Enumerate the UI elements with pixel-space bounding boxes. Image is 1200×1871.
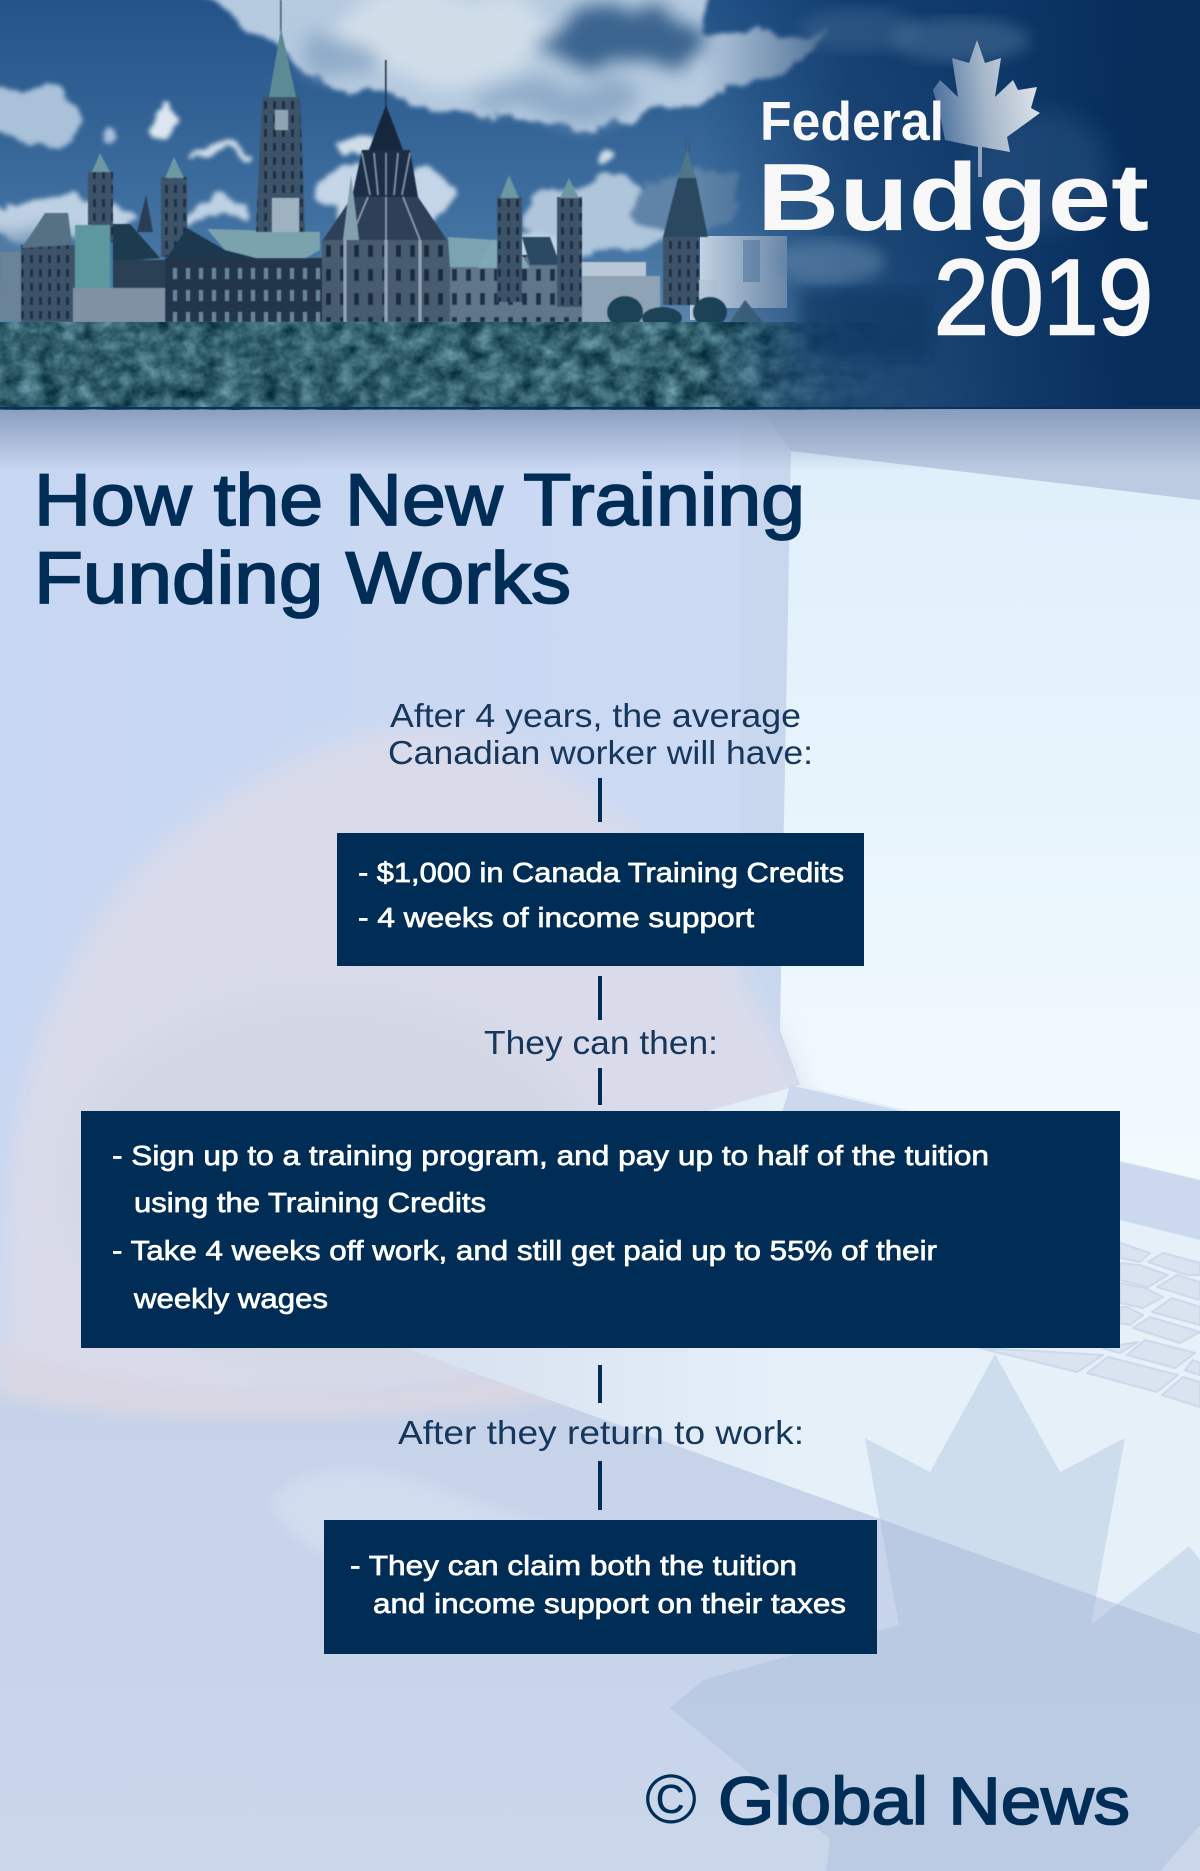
laptop screen xyxy=(780,451,1200,1180)
cloud shading xyxy=(0,0,707,252)
library xyxy=(322,60,450,322)
box: claim: - They can claim both the tuition xyxy=(350,1550,797,1581)
helmet xyxy=(0,727,808,1418)
keyboard xyxy=(980,1243,1200,1407)
box: actions: using the Training Credits xyxy=(134,1187,486,1218)
title: How the New Training xyxy=(34,460,805,541)
lower background xyxy=(0,1348,1200,1871)
blurred right backdrop xyxy=(775,8,1110,360)
intro text: Canadian worker will have: xyxy=(388,734,813,771)
budget logo text xyxy=(757,90,1153,357)
text: they can then: They can then: xyxy=(484,1024,718,1061)
clouds xyxy=(0,0,826,268)
budget logo text: 2019 xyxy=(934,237,1153,357)
title xyxy=(34,460,805,619)
wrench xyxy=(270,1470,650,1590)
peace tower xyxy=(256,0,305,232)
intro text: After 4 years, the average xyxy=(390,697,801,734)
connector line xyxy=(598,1461,602,1510)
box: actions: - Take 4 weeks off work, and still get paid up to 55% of their xyxy=(112,1235,937,1266)
credit: global news: © xyxy=(645,1760,697,1838)
connector line xyxy=(598,778,602,822)
header bottom edge xyxy=(0,407,1200,409)
east towers xyxy=(497,175,582,307)
laptop screen bezel xyxy=(740,409,1200,1200)
pale building xyxy=(690,236,787,320)
box: actions xyxy=(81,1111,1120,1348)
connector line xyxy=(598,1365,602,1403)
budget logo text: Federal xyxy=(760,90,944,152)
connector line xyxy=(598,1068,602,1105)
connector line xyxy=(598,976,602,1020)
header shadow xyxy=(0,409,1200,471)
left far block xyxy=(0,213,76,322)
intro text xyxy=(388,697,813,771)
box: actions: weekly wages xyxy=(133,1283,328,1314)
page background xyxy=(0,409,1200,1871)
box: credits xyxy=(337,833,864,966)
box: credits: - $1,000 in Canada Training Credits xyxy=(358,857,844,888)
scaffold and west wing xyxy=(73,224,167,322)
screen top band xyxy=(760,409,1200,500)
title: Funding Works xyxy=(34,538,571,619)
credit: global news: Global News xyxy=(718,1764,1130,1839)
header banner xyxy=(0,0,1200,410)
box: actions: - Sign up to a training program, and pay up to half of the tuition xyxy=(112,1140,989,1171)
tree line xyxy=(0,322,940,410)
right darkening xyxy=(690,0,1200,409)
budget logo text: Budget xyxy=(757,144,1149,251)
box: credits: - 4 weeks of income support xyxy=(358,902,754,933)
trees by the buildings xyxy=(607,296,763,329)
icon: maple leaf logo xyxy=(933,40,1040,177)
left towers xyxy=(88,153,187,257)
east block xyxy=(448,237,660,322)
box: claim xyxy=(324,1520,877,1654)
sky xyxy=(0,0,1200,409)
parliament buildings xyxy=(0,0,763,329)
west tower far right xyxy=(663,137,708,305)
background maple leaf xyxy=(670,1354,1200,1871)
box: claim: and income support on their taxes xyxy=(373,1588,846,1619)
laptop base xyxy=(405,1085,1200,1634)
text: after they return: After they return to work: xyxy=(398,1414,804,1451)
centre block xyxy=(165,228,325,322)
laptop hinge band xyxy=(780,1085,1200,1240)
